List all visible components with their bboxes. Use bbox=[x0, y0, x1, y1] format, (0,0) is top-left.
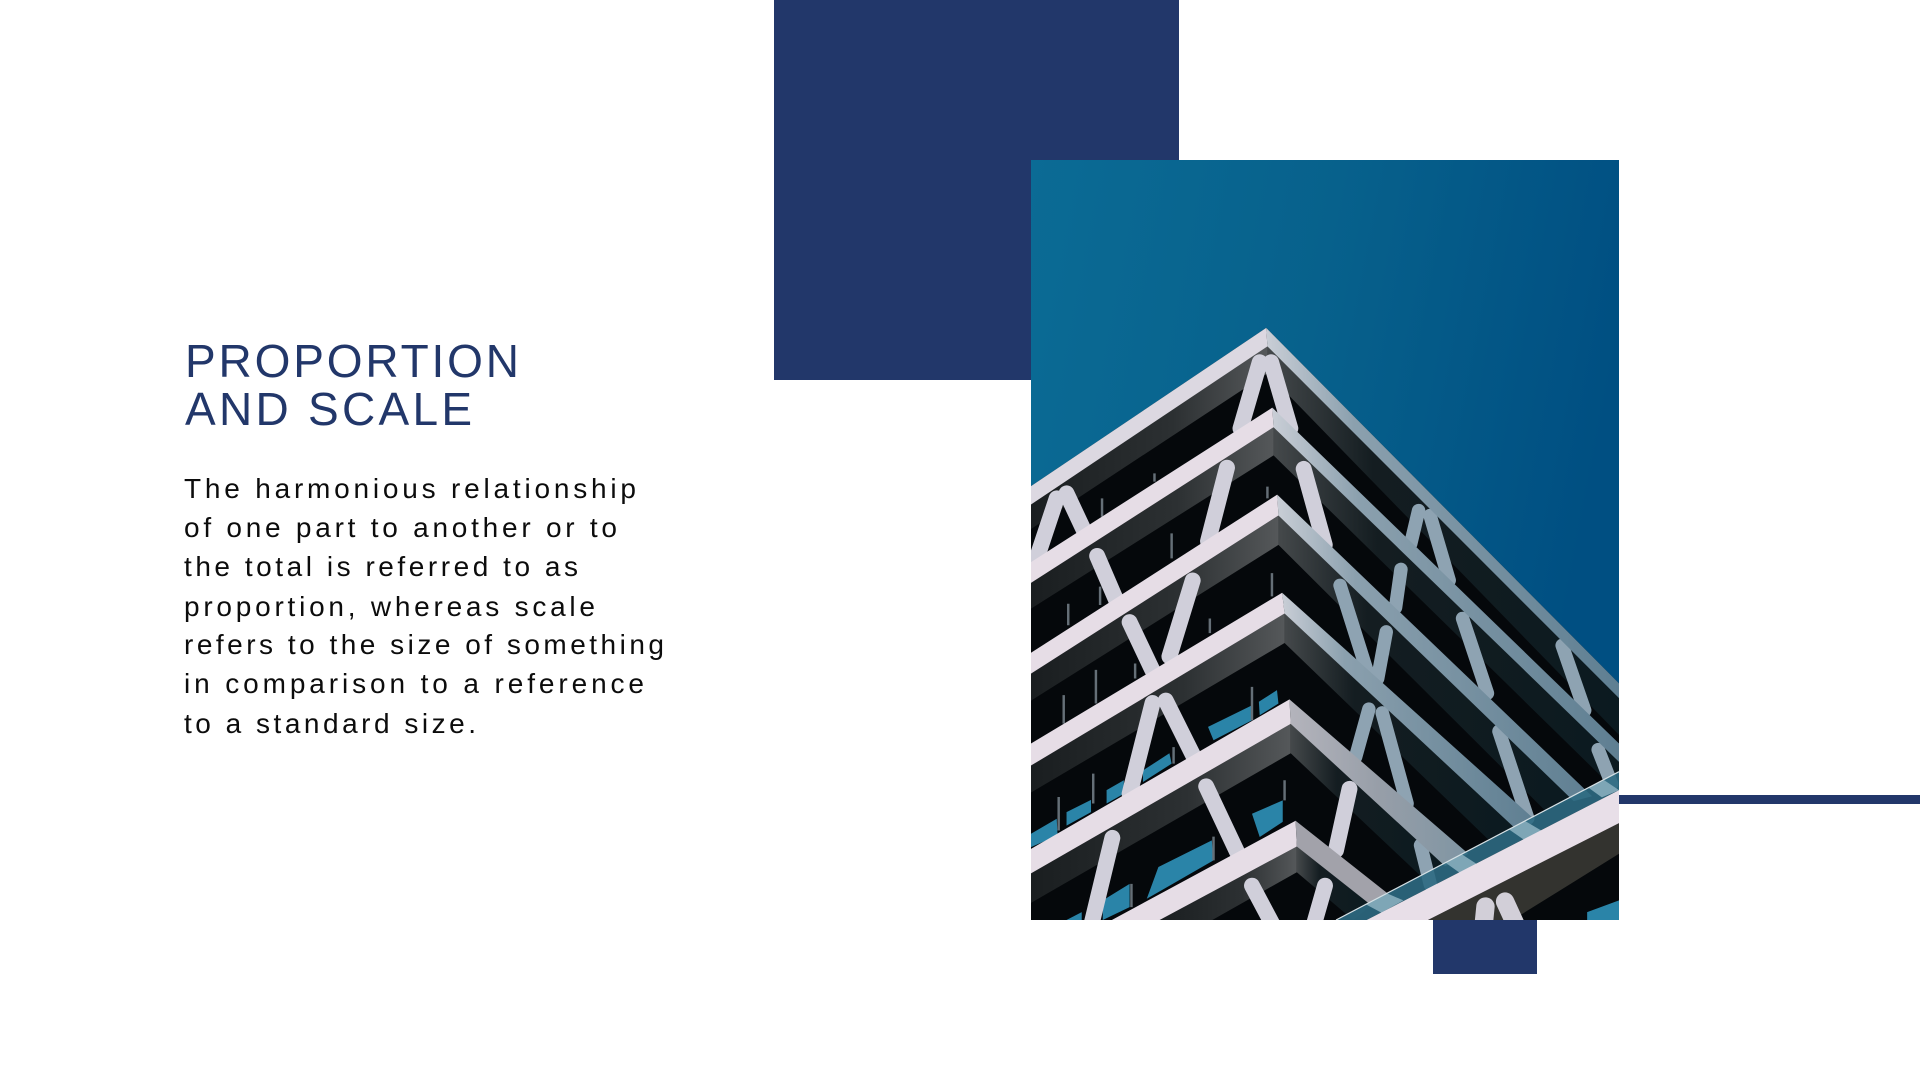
title: AND SCALE bbox=[185, 383, 472, 435]
navy horizontal line bbox=[1619, 795, 1920, 804]
small navy square bbox=[1433, 920, 1537, 974]
title: PROPORTION bbox=[185, 335, 519, 387]
body paragraph: refers to the size of something bbox=[184, 629, 664, 660]
body paragraph bbox=[184, 473, 664, 739]
body paragraph: the total is referred to as bbox=[184, 551, 578, 582]
title bbox=[185, 335, 519, 435]
body paragraph: to a standard size. bbox=[184, 708, 476, 739]
body paragraph: proportion, whereas scale bbox=[184, 591, 595, 622]
body paragraph: in comparison to a reference bbox=[184, 668, 644, 699]
body paragraph: of one part to another or to bbox=[184, 512, 617, 543]
large navy square bbox=[774, 0, 1179, 380]
body paragraph: The harmonious relationship bbox=[184, 473, 636, 504]
photo: modern building against blue sky bbox=[1031, 160, 1619, 920]
